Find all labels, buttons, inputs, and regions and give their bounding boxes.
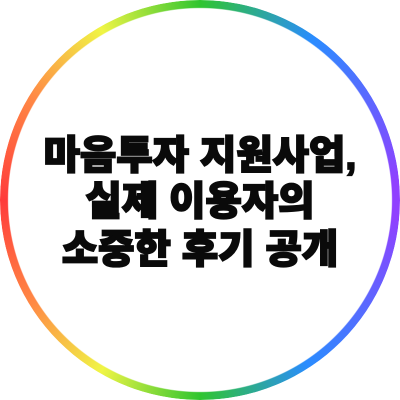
title line 1: 마음투자 지원사업,	[44, 134, 356, 178]
title	[44, 134, 356, 272]
title line 2: 실제 이용자의	[85, 180, 314, 224]
title line 3: 소중한 후기 공개	[62, 228, 338, 272]
